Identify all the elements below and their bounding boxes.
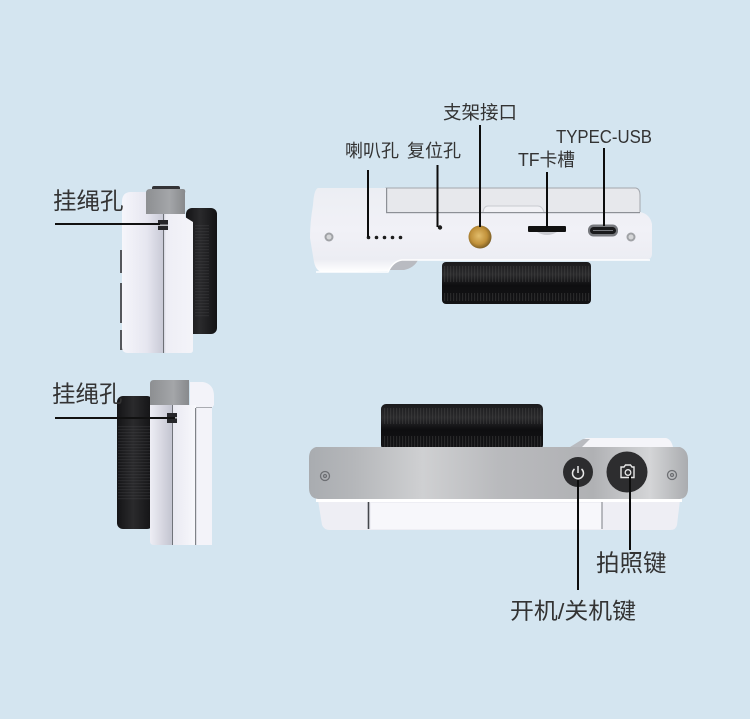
label: strap hole upper: 挂绳孔 [53,188,124,214]
camera: left side view, upper [120,186,217,353]
rear panel [386,188,640,213]
body [310,188,652,272]
leader lines: button callouts [577,476,631,590]
label: strap hole lower: 挂绳孔 [52,381,122,407]
camera: right side view, lower [117,380,214,545]
leader lines: port callouts [367,125,605,237]
label: strap hole upper [53,188,160,225]
label: strap hole lower [52,381,175,419]
USB-C port [588,224,618,236]
label: TF slot: TF卡槽 [518,150,575,170]
TF slot [537,232,557,235]
label: shutter button: 拍照键 [596,550,666,576]
camera: top view with buttons [309,404,688,530]
screws [324,232,636,242]
label: USB-C: TYPEC-USB [556,127,652,147]
label: reset hole: 复位孔 [407,141,461,161]
screws [320,470,676,480]
speaker holes [367,236,402,239]
strap hole [158,220,168,230]
label: tripod socket: 支架接口 [443,102,517,123]
power button [563,457,593,487]
label: power button: 开机/关机键 [510,599,636,624]
camera: bottom view with ports [310,188,652,304]
strap hole [167,413,177,423]
label: speaker holes: 喇叭孔 [345,141,399,161]
tripod socket [468,226,492,248]
reset hole [438,225,442,230]
shutter button [606,452,648,492]
